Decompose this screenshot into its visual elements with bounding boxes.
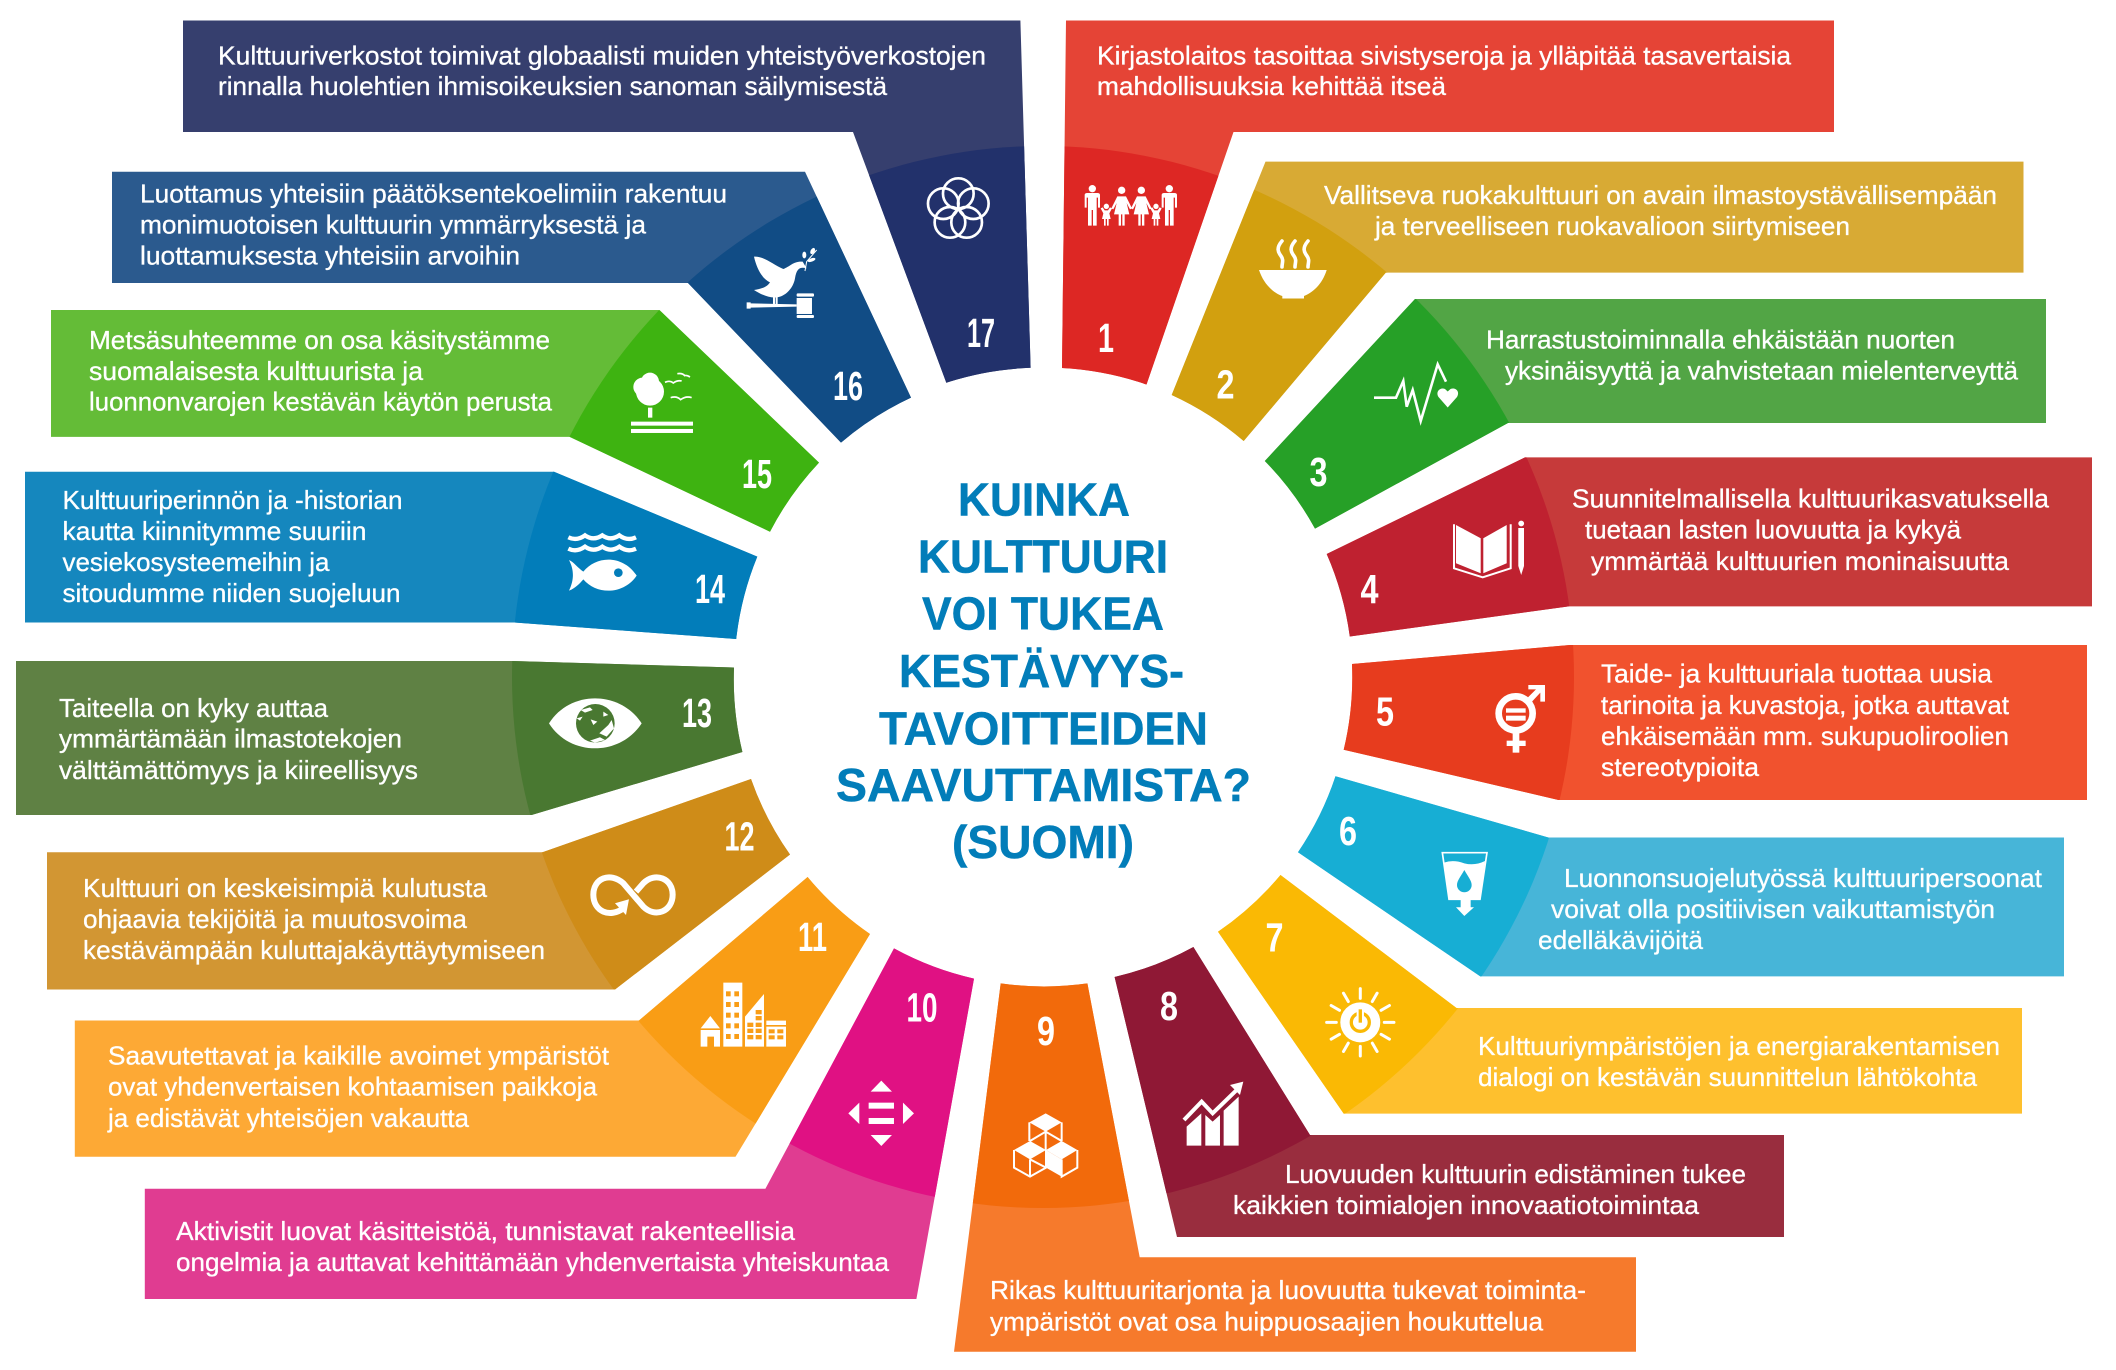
icon: bowl (1259, 241, 1327, 298)
icon: infinity loop (593, 877, 673, 915)
text: goal 16: Luottamus yhteisiin päätöksentekoelimiin rakentuu (140, 179, 727, 209)
text: goal 1 (1097, 40, 1792, 101)
text: goal 6: edelläkävijöitä (1538, 925, 1704, 955)
number 13: 13 (682, 690, 712, 736)
number 5: 5 (1376, 688, 1394, 734)
text: goal 8: Luovuuden kulttuurin edistäminen tukee (1285, 1159, 1746, 1189)
icon: gender equality (1499, 685, 1545, 753)
title (836, 474, 1251, 868)
panel: goal 1 (1062, 20, 1834, 384)
icon: tree and birds (631, 373, 693, 433)
panel: goal 11 (75, 877, 870, 1157)
number 7: 7 (1266, 914, 1284, 960)
icon: reduced inequalities (848, 1081, 914, 1146)
text: goal 9: Rikas kulttuuritarjonta ja luovuutta tukevat toiminta- (990, 1275, 1586, 1305)
text: goal 7 (1478, 1031, 2000, 1092)
text: goal 17 (218, 40, 986, 101)
title: (SUOMI) (952, 816, 1134, 868)
text: goal 9: ympäristöt ovat osa huippuosaajien houkuttelua (990, 1306, 1544, 1336)
panel: goal 4 (1327, 457, 2092, 636)
number 6: 6 (1339, 808, 1357, 854)
number 8: 8 (1160, 983, 1178, 1029)
number 15: 15 (742, 451, 772, 497)
icon: cubes (1014, 1113, 1077, 1177)
icon: growth chart (1184, 1082, 1243, 1146)
panel: goal 12 (47, 779, 790, 990)
text: goal 7: dialogi on kestävän suunnittelun lähtökohta (1478, 1062, 1978, 1092)
panel: goal 8 (1115, 947, 1784, 1237)
text: goal 11: ja edistävät yhteisöjen vakautta (107, 1103, 470, 1133)
panel: goal 14 (25, 472, 757, 639)
number 4: 4 (1360, 566, 1379, 612)
text: goal 15 (89, 325, 553, 417)
title: KULTTUURI (918, 531, 1168, 583)
icon: family (1085, 185, 1177, 226)
panel: goal 2 (1172, 162, 2024, 441)
text: goal 3: Harrastustoiminnalla ehkäistään nuorten (1486, 324, 1955, 354)
text: goal 14: sitoudumme niiden suojeluun (62, 578, 400, 608)
number 16: 16 (833, 363, 863, 409)
text: goal 6: voivat olla positiivisen vaikuttamistyön (1551, 894, 1995, 924)
text: goal 15: suomalaisesta kulttuurista ja (89, 356, 424, 386)
panel: goal 9 (954, 983, 1636, 1352)
number 3: 3 (1310, 449, 1328, 495)
text: goal 4: tuetaan lasten luovuutta ja kykyä (1585, 514, 1962, 544)
text: goal 15: luonnonvarojen kestävän käytön perusta (89, 387, 553, 417)
icon: city buildings (701, 983, 786, 1047)
text: goal 13: Taiteella on kyky auttaa (59, 693, 329, 723)
text: goal 4 (1572, 484, 2050, 576)
text: goal 16 (140, 179, 727, 271)
number 1: 1 (1098, 315, 1114, 361)
text: goal 5: tarinoita ja kuvastoja, jotka auttavat (1601, 690, 2010, 720)
title: KUINKA (958, 474, 1130, 526)
icon: dove and gavel (747, 247, 817, 318)
text: goal 10: ongelmia ja auttavat kehittämään yhdenvertaista yhteiskuntaa (176, 1247, 890, 1277)
text: goal 5 (1601, 659, 2010, 782)
text: goal 11: ovat yhdenvertaisen kohtaamisen paikkoja (108, 1072, 598, 1102)
text: goal 4: Suunnitelmallisella kulttuurikasvatuksella (1572, 484, 2050, 514)
icon: interlocking circles (928, 178, 989, 238)
text: goal 16: luottamuksesta yhteisiin arvoihin (140, 241, 520, 271)
icon: eye with globe (549, 698, 642, 748)
text: goal 9 (990, 1275, 1586, 1336)
text: goal 12: ohjaavia tekijöitä ja muutosvoima (83, 904, 468, 934)
text: goal 14: kautta kiinnitymme suuriin (62, 516, 366, 546)
icon: water glass (1442, 853, 1487, 916)
text: goal 2: ja terveelliseen ruokavalioon siirtymiseen (1374, 211, 1850, 241)
number 2: 2 (1216, 362, 1234, 408)
text: goal 11: Saavutettavat ja kaikille avoimet ympäristöt (108, 1040, 610, 1070)
text: goal 12: kestävämpään kuluttajakäyttäytymiseen (83, 935, 545, 965)
text: goal 13: välttämättömyys ja kiireellisyys (59, 755, 418, 785)
text: goal 16: monimuotoisen kulttuurin ymmärryksestä ja (140, 210, 647, 240)
text: goal 11 (107, 1040, 610, 1133)
text: goal 14: vesiekosysteemeihin ja (62, 547, 330, 577)
panel: goal 16 (112, 172, 911, 443)
text: goal 8 (1233, 1159, 1746, 1220)
text: goal 7: Kulttuuriympäristöjen ja energiarakentamisen (1478, 1031, 2000, 1061)
panel: goal 5 (1344, 645, 2087, 800)
text: goal 6: Luonnonsuojelutyössä kulttuuripersoonat (1564, 863, 2043, 893)
text: goal 12: Kulttuuri on keskeisimpiä kulutusta (83, 873, 488, 903)
text: goal 10: Aktivistit luovat käsitteistöä, tunnistavat rakenteellisia (176, 1216, 796, 1246)
text: goal 14 (62, 485, 402, 608)
icon: health pulse and heart (1374, 364, 1458, 421)
title: TAVOITTEIDEN (879, 702, 1208, 754)
title: SAAVUTTAMISTA? (836, 759, 1251, 811)
panel: goal 3 (1265, 299, 2046, 529)
panel: goal 7 (1218, 875, 2022, 1114)
title: KESTÄVYYS- (899, 645, 1184, 697)
number 10: 10 (906, 984, 938, 1030)
panel: goal 15 (51, 310, 819, 532)
icon: fish and waves (568, 535, 637, 591)
text: goal 12 (83, 873, 545, 965)
text: goal 1: Kirjastolaitos tasoittaa sivistyseroja ja ylläpitää tasavertaisia (1097, 40, 1792, 70)
text: goal 1: mahdollisuuksia kehittää itseä (1097, 71, 1447, 101)
text: goal 8: kaikkien toimialojen innovaatiotoimintaa (1233, 1190, 1700, 1220)
text: goal 2 (1324, 180, 1997, 241)
number 9: 9 (1037, 1008, 1055, 1054)
number 12: 12 (724, 814, 754, 860)
number 14: 14 (695, 566, 725, 612)
text: goal 5: stereotypioita (1601, 752, 1760, 782)
icon: sun with power button (1327, 989, 1394, 1056)
panel: goal 17 (183, 20, 1031, 383)
text: goal 17: Kulttuuriverkostot toimivat globaalisti muiden yhteistyöverkostojen (218, 40, 986, 70)
text: goal 3 (1486, 324, 2019, 386)
panel: goal 13 (16, 661, 742, 815)
text: goal 3: yksinäisyyttä ja vahvistetaan mielenterveyttä (1505, 356, 2019, 386)
panel: goal 6 (1298, 776, 2064, 976)
text: goal 15: Metsäsuhteemme on osa käsitystämme (89, 325, 550, 355)
text: goal 10 (176, 1216, 890, 1277)
title: VOI TUKEA (922, 588, 1164, 640)
text: goal 13 (59, 693, 418, 785)
text: goal 2: Vallitseva ruokakulttuuri on avain ilmastoystävällisempään (1324, 180, 1997, 210)
number 11: 11 (798, 914, 827, 960)
text: goal 5: ehkäisemään mm. sukupuoliroolien (1601, 721, 2009, 751)
icon: book and pencil (1454, 521, 1524, 577)
text: goal 4: ymmärtää kulttuurien moninaisuutta (1591, 546, 2010, 576)
number 17: 17 (967, 310, 995, 356)
text: goal 6 (1538, 863, 2043, 955)
text: goal 14: Kulttuuriperinnön ja -historian (62, 485, 402, 515)
text: goal 17: rinnalla huolehtien ihmisoikeuksien sanoman säilymisestä (218, 71, 888, 101)
text: goal 13: ymmärtämään ilmastotekojen (59, 724, 402, 754)
panel: goal 10 (145, 948, 974, 1299)
text: goal 5: Taide- ja kulttuuriala tuottaa uusia (1601, 659, 1993, 689)
